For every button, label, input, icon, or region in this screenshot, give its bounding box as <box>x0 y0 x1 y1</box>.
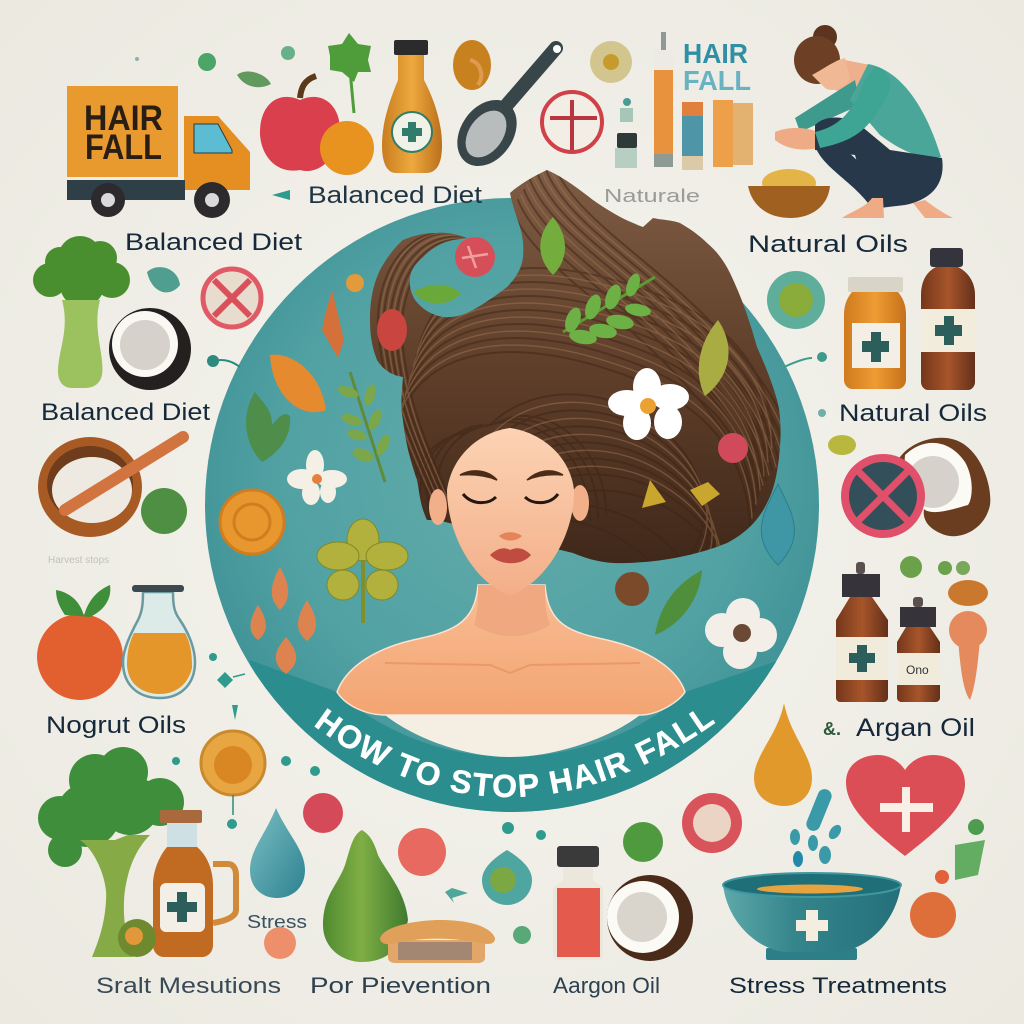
icon: top small items: HAIR <box>683 38 748 69</box>
panel: hair fall truck: FALL <box>85 128 162 167</box>
icon: oil bottle with cross <box>382 40 442 173</box>
icon: jar and bottle <box>767 248 975 417</box>
hair decorations: leaves and flower <box>377 217 748 508</box>
icon: orange medal and red blob <box>172 731 343 833</box>
icon: medicine bottles: Ono <box>906 663 929 677</box>
icon: brush <box>445 45 561 177</box>
icon: tomato and carafe <box>37 585 195 700</box>
panel: hair fall truck: HAIR <box>84 99 163 138</box>
label: natural top: Naturale <box>604 186 700 206</box>
panel: central teal circle <box>205 198 819 830</box>
figure: crouching woman <box>748 25 953 218</box>
icon: mortar and pestle <box>38 437 187 537</box>
icon: red bottle and coconut <box>553 846 693 961</box>
icon: water drop and stress label: Stress <box>247 912 307 932</box>
icon: small items centre bottom <box>398 793 742 944</box>
icon: top small items <box>453 32 753 170</box>
icon: apple, orange and leaf <box>260 33 374 175</box>
icon: broccoli and syrup bottle <box>38 747 236 957</box>
icon: leafy vegetable and coconut <box>33 236 191 390</box>
label: nogrut oils: Nogrut Oils <box>46 712 186 739</box>
label: argan oil: &. <box>823 719 841 739</box>
icon: medicine bottles <box>836 556 988 702</box>
icon: crossed circle and teal leaf <box>147 267 261 367</box>
label: balanced diet left: Balanced Diet <box>41 399 210 426</box>
icon: bowl with cross <box>723 787 985 960</box>
labels: bottom row <box>96 973 947 998</box>
labels: bottom row: Por Pievention <box>310 973 491 998</box>
title: how to stop hair fall: HOW TO STOP HAIR FALL <box>314 708 716 798</box>
icon: small floating items top left <box>135 46 295 200</box>
circle decorations <box>220 274 794 674</box>
label: natural oils upper right: Natural Oils <box>748 231 908 258</box>
label: balanced diet upper left: Balanced Diet <box>125 229 302 256</box>
icon: crossed circle and coconut right <box>828 435 990 538</box>
label: natural oils right: Natural Oils <box>839 400 987 427</box>
labels: bottom row: Sralt Mesutions <box>96 973 281 998</box>
label: faded small text: Harvest stops <box>48 555 109 566</box>
icon: wooden comb <box>380 920 495 963</box>
panel: hair fall truck <box>67 86 250 218</box>
woman: face <box>429 428 589 596</box>
icon: top small items: FALL <box>683 65 751 96</box>
label: argan oil: Argan Oil <box>856 714 975 742</box>
icon: large amber oil drop <box>754 703 812 806</box>
labels: bottom row: Aargon Oil <box>553 973 660 998</box>
woman: neck and shoulders <box>337 585 685 757</box>
icon: water drop and stress label <box>247 808 307 959</box>
icon: small teal dots left of circle <box>209 653 320 776</box>
icon: avocado <box>323 830 408 962</box>
label: balanced diet top: Balanced Diet <box>308 182 482 209</box>
icon: heart with cross <box>846 755 965 856</box>
label: argan oil <box>823 714 975 742</box>
hair <box>370 170 781 564</box>
labels: bottom row: Stress Treatments <box>729 973 947 998</box>
